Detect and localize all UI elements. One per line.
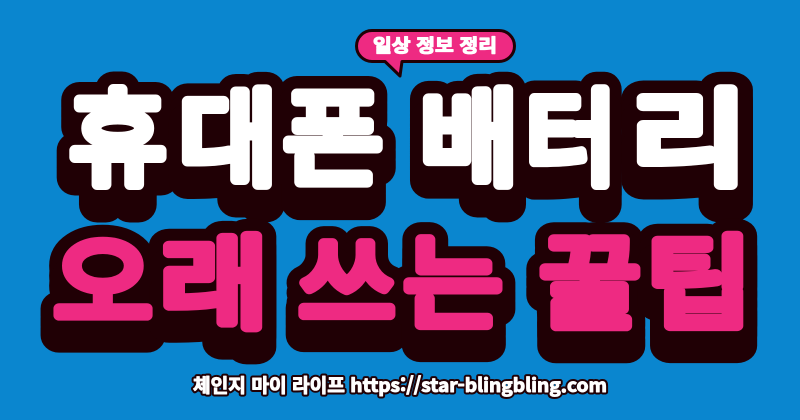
- title line 2: 오래 쓰는 꿀팁: 오: [54, 203, 152, 348]
- title line 1 extruded shadow: 배: [420, 67, 518, 217]
- title line 1 extruded shadow: 폰: [283, 65, 383, 216]
- title line 2 extruded shadow: 오: [54, 223, 152, 368]
- title line 2 extruded shadow: 는: [404, 223, 502, 368]
- title line 2: 오래 쓰는 꿀팁: [54, 203, 752, 349]
- title line 2 extruded shadow: 팁: [646, 204, 752, 349]
- title line 1 extruded shadow: 폰: [283, 75, 383, 226]
- speech bubble tag: 일상 정보 정리: [357, 30, 514, 76]
- title line 1 extruded shadow: 리: [631, 66, 747, 216]
- title line 2 extruded shadow: 래: [160, 225, 268, 368]
- title line 1 extruded shadow: 배: [420, 77, 518, 227]
- title line 1: 휴대폰 배터리: 폰: [283, 55, 383, 206]
- title line 1: 휴대폰 배터리: 대: [179, 57, 277, 207]
- title line 2: 오래 쓰는 꿀팁: 쓰: [299, 203, 395, 348]
- title line 1 extruded shadow: 배: [420, 57, 518, 207]
- title line 1 extruded shadow: 대: [179, 57, 277, 207]
- title line 1: 휴대폰 배터리: 리: [631, 56, 747, 206]
- title line 2 extruded shadow: 쓰: [299, 203, 395, 348]
- title line 1 extruded shadow: 터: [525, 67, 617, 217]
- title line 2: 오래 쓰는 꿀팁: 팁: [646, 204, 752, 349]
- title line 2 extruded shadow: 꿀: [540, 214, 640, 359]
- title line 1 extruded shadow: 대: [179, 67, 277, 217]
- title line 1 extruded shadow: 터: [525, 77, 617, 227]
- title line 2 extruded shadow: 래: [160, 205, 268, 348]
- title line 2 extruded shadow: 꿀: [540, 204, 640, 349]
- title line 2: 오래 쓰는 꿀팁: 래: [160, 205, 268, 348]
- title line 2 extruded shadow: 는: [404, 203, 502, 348]
- footer: site credit: 체인지 마이 라이프 https://star-blingbling.com: [193, 371, 607, 398]
- title line 1 extruded shadow: 휴: [70, 67, 166, 217]
- title line 2 extruded shadow: [54, 203, 752, 369]
- title line 1: 휴대폰 배터리: 휴: [70, 57, 166, 207]
- title line 1: 휴대폰 배터리: 배: [420, 57, 518, 207]
- title line 2 extruded shadow: 쓰: [299, 223, 395, 368]
- title line 1 extruded shadow: 리: [631, 56, 747, 206]
- title line 1: 휴대폰 배터리: [70, 55, 747, 207]
- speech bubble tag: 일상 정보 정리: 일상 정보 정리: [373, 32, 497, 58]
- title line 1 extruded shadow: 휴: [70, 57, 166, 207]
- title line 2: 오래 쓰는 꿀팁: 꿀: [540, 204, 640, 349]
- title line 1 extruded shadow: 휴: [70, 77, 166, 227]
- footer: site credit: 체인지 마이 라이프 https://star-blingbling.com: [193, 371, 607, 398]
- title line 1 extruded shadow: 폰: [283, 55, 383, 206]
- title line 1: 휴대폰 배터리: 터: [525, 57, 617, 207]
- title line 1 extruded shadow: 대: [179, 77, 277, 227]
- title line 2 extruded shadow: 쓰: [299, 213, 395, 358]
- title line 2 extruded shadow: 오: [54, 203, 152, 348]
- title line 2 extruded shadow: 꿀: [540, 224, 640, 369]
- title line 2 extruded shadow: 는: [404, 213, 502, 358]
- title line 2 extruded shadow: 팁: [646, 214, 752, 359]
- title line 2 extruded shadow: 오: [54, 213, 152, 358]
- title line 2 extruded shadow: 래: [160, 215, 268, 358]
- title line 2 extruded shadow: 팁: [646, 224, 752, 369]
- title line 1 extruded shadow: 터: [525, 57, 617, 207]
- title line 1 extruded shadow: [70, 55, 747, 227]
- title line 2: 오래 쓰는 꿀팁: 는: [404, 203, 502, 348]
- title line 1 extruded shadow: 리: [631, 76, 747, 226]
